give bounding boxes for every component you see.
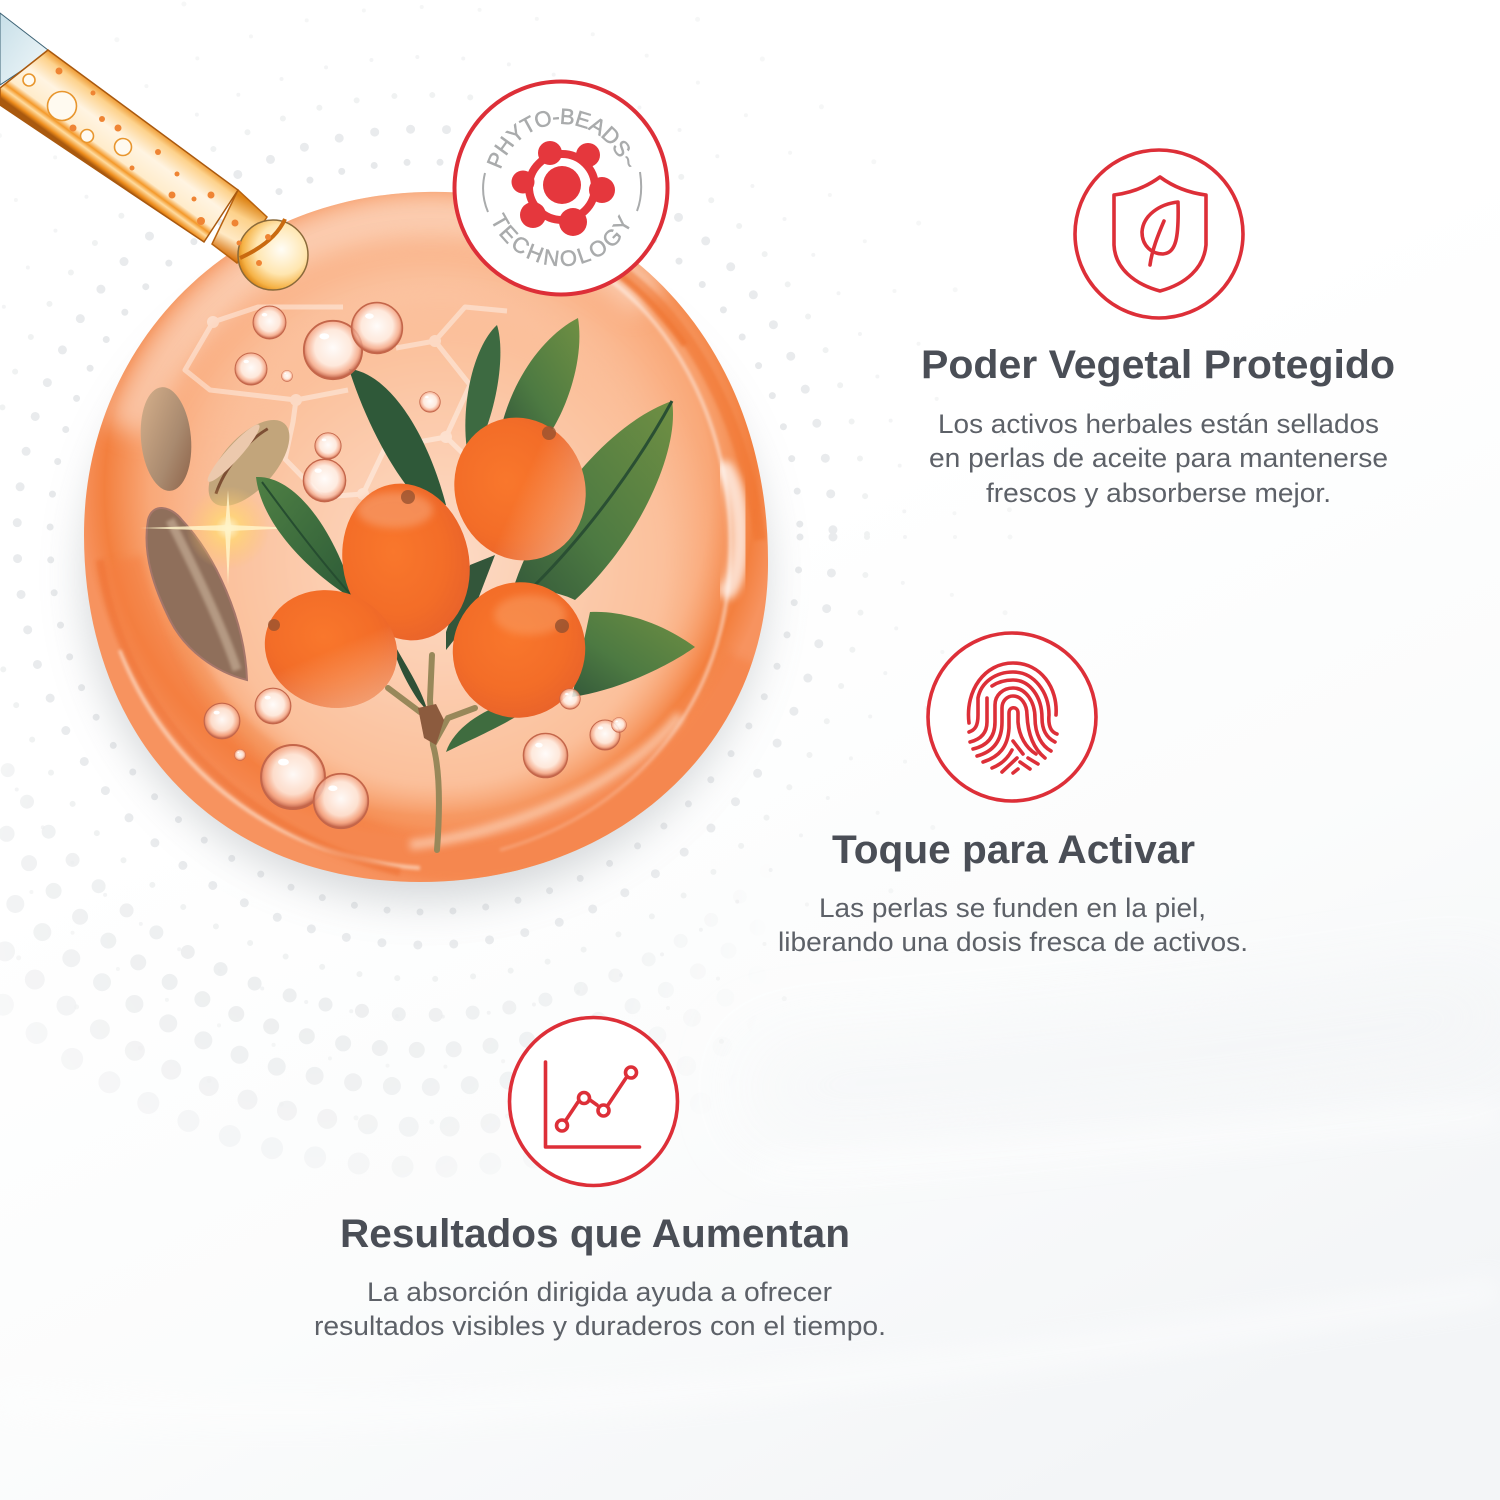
description: frescos y absorberse mejor. xyxy=(986,478,1331,508)
golden sparkle xyxy=(140,486,300,585)
description xyxy=(929,409,1388,508)
description: en perlas de aceite para mantenerse xyxy=(929,443,1388,473)
feature: Resultados que Aumentan xyxy=(314,1018,886,1341)
badge lower label: TECHNOLOGY xyxy=(492,212,630,266)
badge side ticks xyxy=(483,172,641,212)
description: Las perlas se funden en la piel, xyxy=(819,893,1206,923)
dropper bulb xyxy=(238,220,308,290)
bead body xyxy=(84,192,768,882)
oil dropper xyxy=(0,13,308,290)
heading: Resultados que Aumentan xyxy=(340,1212,850,1256)
icon: fingerprint xyxy=(928,633,1096,801)
description xyxy=(314,1277,886,1341)
oil bead with botanical contents xyxy=(84,192,768,900)
glass tip xyxy=(0,13,48,85)
leaves xyxy=(256,318,695,752)
sea buckthorn branch xyxy=(249,318,695,850)
icon: growth line chart xyxy=(510,1018,678,1186)
berries xyxy=(249,400,604,736)
heading: Poder Vegetal Protegido xyxy=(921,343,1395,387)
description: La absorción dirigida ayuda a ofrecer xyxy=(367,1277,832,1307)
oil droplets xyxy=(56,68,271,266)
dropper tube xyxy=(0,50,238,242)
feature: Toque para Activar xyxy=(778,633,1248,957)
description xyxy=(778,893,1248,957)
description: resultados visibles y duraderos con el tiempo. xyxy=(314,1311,886,1341)
icon: shield with leaf xyxy=(1075,150,1243,318)
badge upper label: PHYTO-BEADS~ xyxy=(486,108,632,168)
molecular hexagon lattice xyxy=(185,307,507,500)
heading: Toque para Activar xyxy=(832,828,1195,872)
floating bubbles xyxy=(204,303,627,828)
description: Los activos herbales están sellados xyxy=(938,409,1379,439)
dot pattern halo xyxy=(0,0,1055,1167)
description: liberando una dosis fresca de activos. xyxy=(778,927,1248,957)
stem xyxy=(388,655,475,850)
bead shadow xyxy=(85,250,765,900)
dropper neck xyxy=(212,190,267,263)
badge: Phyto-Beads Technology xyxy=(452,80,670,296)
feature: Poder Vegetal Protegido xyxy=(921,150,1395,508)
molecule icon xyxy=(512,141,615,236)
air bubbles xyxy=(23,74,132,156)
sea buckthorn seeds xyxy=(137,385,304,680)
